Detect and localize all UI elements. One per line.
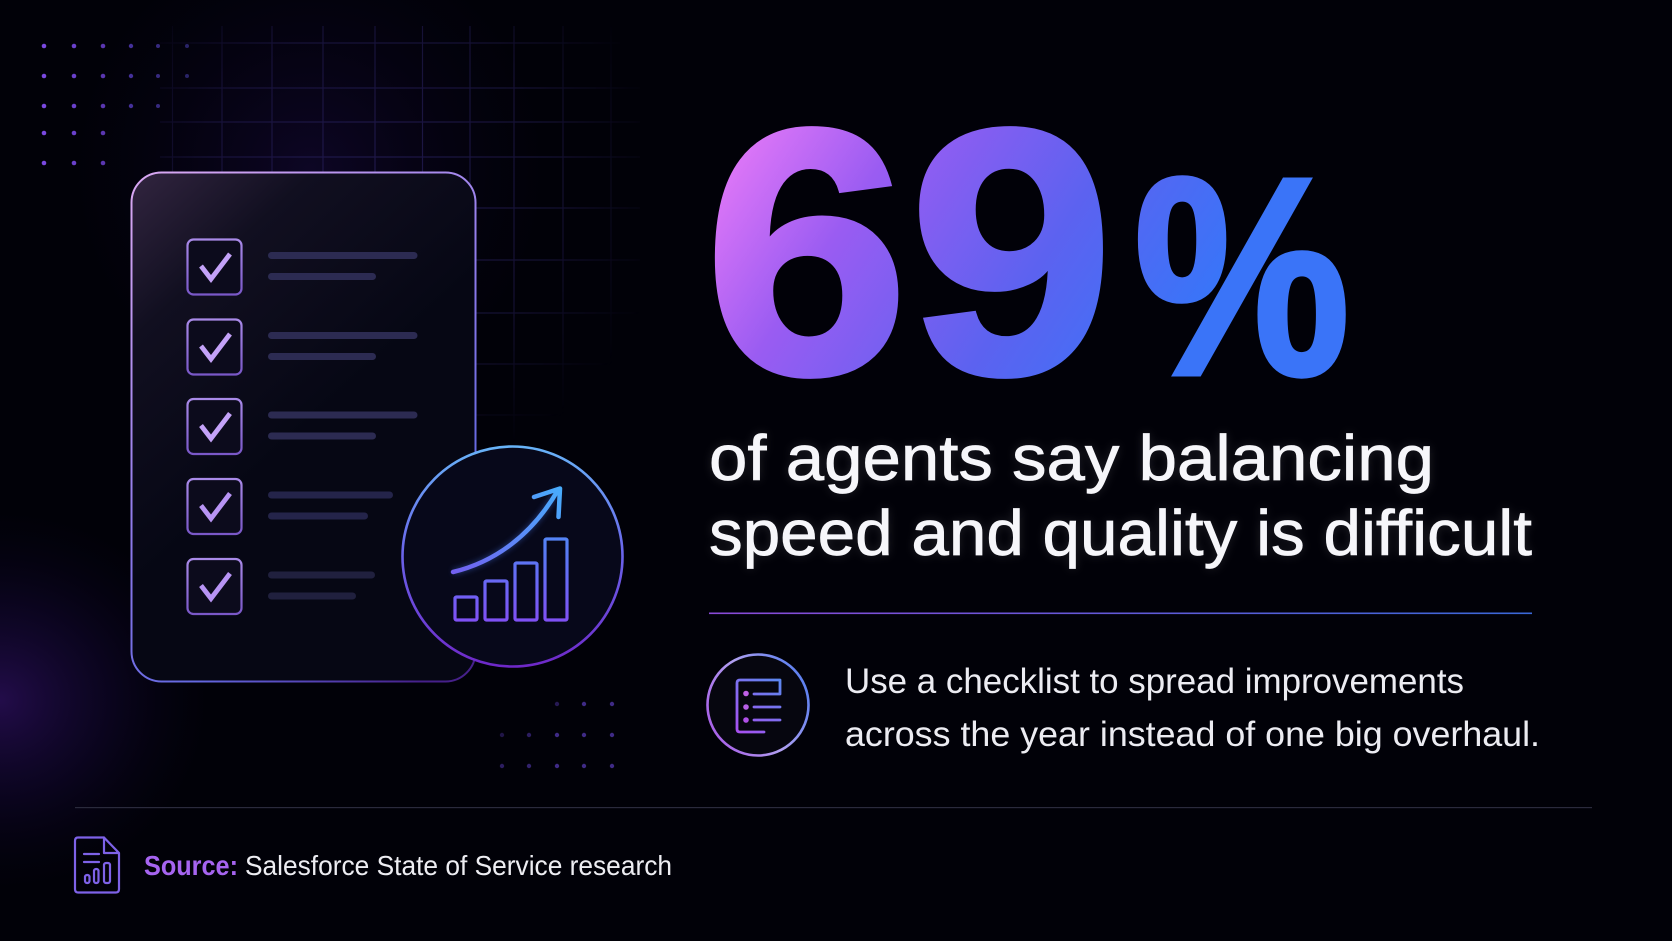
- big statistic: 69%: 69: [704, 57, 1114, 448]
- headline text: speed and quality is difficult: [709, 497, 1532, 569]
- bar chart: [455, 539, 567, 620]
- checklist row 4: [188, 479, 393, 534]
- checklist row 5: [188, 559, 375, 614]
- headline: [709, 422, 1532, 569]
- big statistic: 69%: %: [1134, 119, 1350, 434]
- icon: checklist circle: [708, 654, 808, 756]
- headline glow: speed and quality is difficult: [709, 497, 1532, 569]
- checklist row 1: [188, 240, 418, 294]
- checklist row 3: [188, 399, 418, 454]
- footer divider: [75, 807, 1592, 808]
- tip text: [845, 662, 1540, 754]
- panel: checklist card: [132, 172, 476, 682]
- icon: source document: [75, 838, 119, 892]
- dot pattern: top left: [42, 44, 189, 165]
- dot pattern: bottom right: [500, 702, 614, 768]
- tip text: across the year instead of one big overhaul.: [845, 715, 1540, 754]
- headline glow: [709, 422, 1532, 569]
- tip text: Use a checklist to spread improvements: [845, 662, 1464, 701]
- divider: [709, 612, 1532, 614]
- icon: growth chart badge: [402, 446, 622, 666]
- source line: Salesforce State of Service research: [245, 850, 672, 881]
- background grid: [160, 26, 640, 421]
- checklist row 2: [188, 320, 418, 374]
- headline text: [709, 422, 1532, 569]
- growth arrow glow: [453, 490, 558, 572]
- big statistic: 69%: [704, 57, 1350, 448]
- source line: Source:: [144, 850, 238, 881]
- growth arrow: [453, 488, 560, 572]
- headline text: of agents say balancing: [709, 422, 1434, 494]
- headline glow: of agents say balancing: [709, 422, 1434, 494]
